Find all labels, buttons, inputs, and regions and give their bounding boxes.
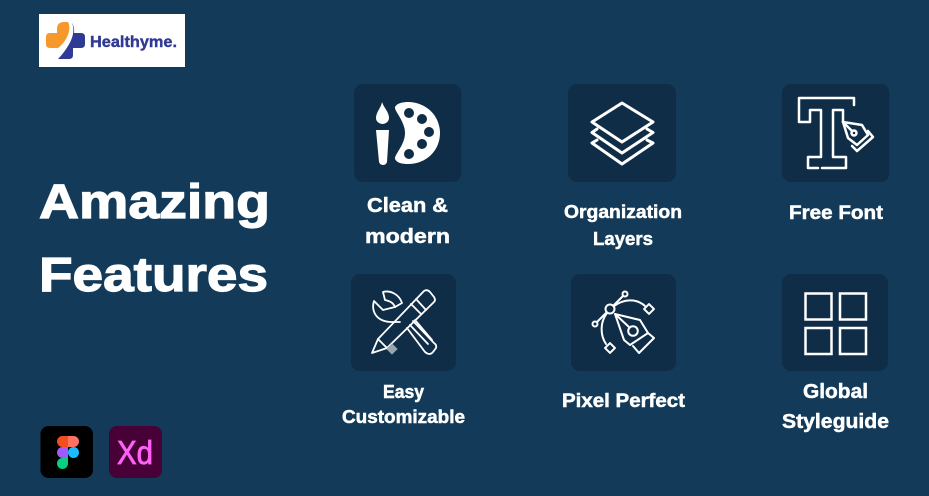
label: Global Styleguide: Global [803, 381, 868, 403]
icon: palette and brush [376, 102, 440, 165]
label: Clean & modern [365, 195, 450, 248]
label: Global Styleguide [782, 381, 889, 433]
label: Easy Customizable: Easy [383, 382, 424, 402]
feature: Clean and modern [354, 84, 462, 248]
label: Easy Customizable [342, 382, 465, 427]
icon: pen tool with bezier handles [592, 292, 654, 353]
icon: serif T with pen nib [799, 98, 873, 168]
heading: Amazing Features: Amazing [39, 176, 270, 229]
icon: Adobe XD badge [109, 426, 162, 478]
label: Organization Layers: Layers [593, 229, 653, 249]
label: Organization Layers [564, 202, 682, 249]
logo: Healthyme [39, 14, 185, 67]
label: Easy Customizable: Customizable [342, 407, 465, 427]
icon: wrench and pencil [372, 290, 436, 355]
heading: Amazing Features: Features [39, 249, 268, 302]
feature: Global Styleguide [782, 274, 889, 433]
icon: Adobe XD badge: Xd [117, 434, 153, 471]
label: Clean & modern: modern [365, 226, 450, 248]
label: Organization Layers: Organization [564, 202, 682, 222]
label: Global Styleguide: Styleguide [782, 411, 889, 433]
label: Free Font: Free Font [789, 203, 884, 224]
logo: Healthyme: Healthyme. [90, 34, 177, 51]
label: Pixel Perfect: Pixel Perfect [562, 391, 686, 412]
feature: Free Font [782, 84, 890, 224]
feature: Organization Layers [564, 84, 682, 249]
icon: layers [592, 103, 653, 164]
feature: Easy Customizable [342, 274, 465, 427]
feature: Pixel Perfect [562, 274, 686, 412]
heading: Amazing Features [39, 176, 270, 302]
label: Clean & modern: Clean & [367, 195, 448, 217]
icon: Figma badge [40, 426, 93, 478]
icon: four square grid [806, 294, 866, 354]
